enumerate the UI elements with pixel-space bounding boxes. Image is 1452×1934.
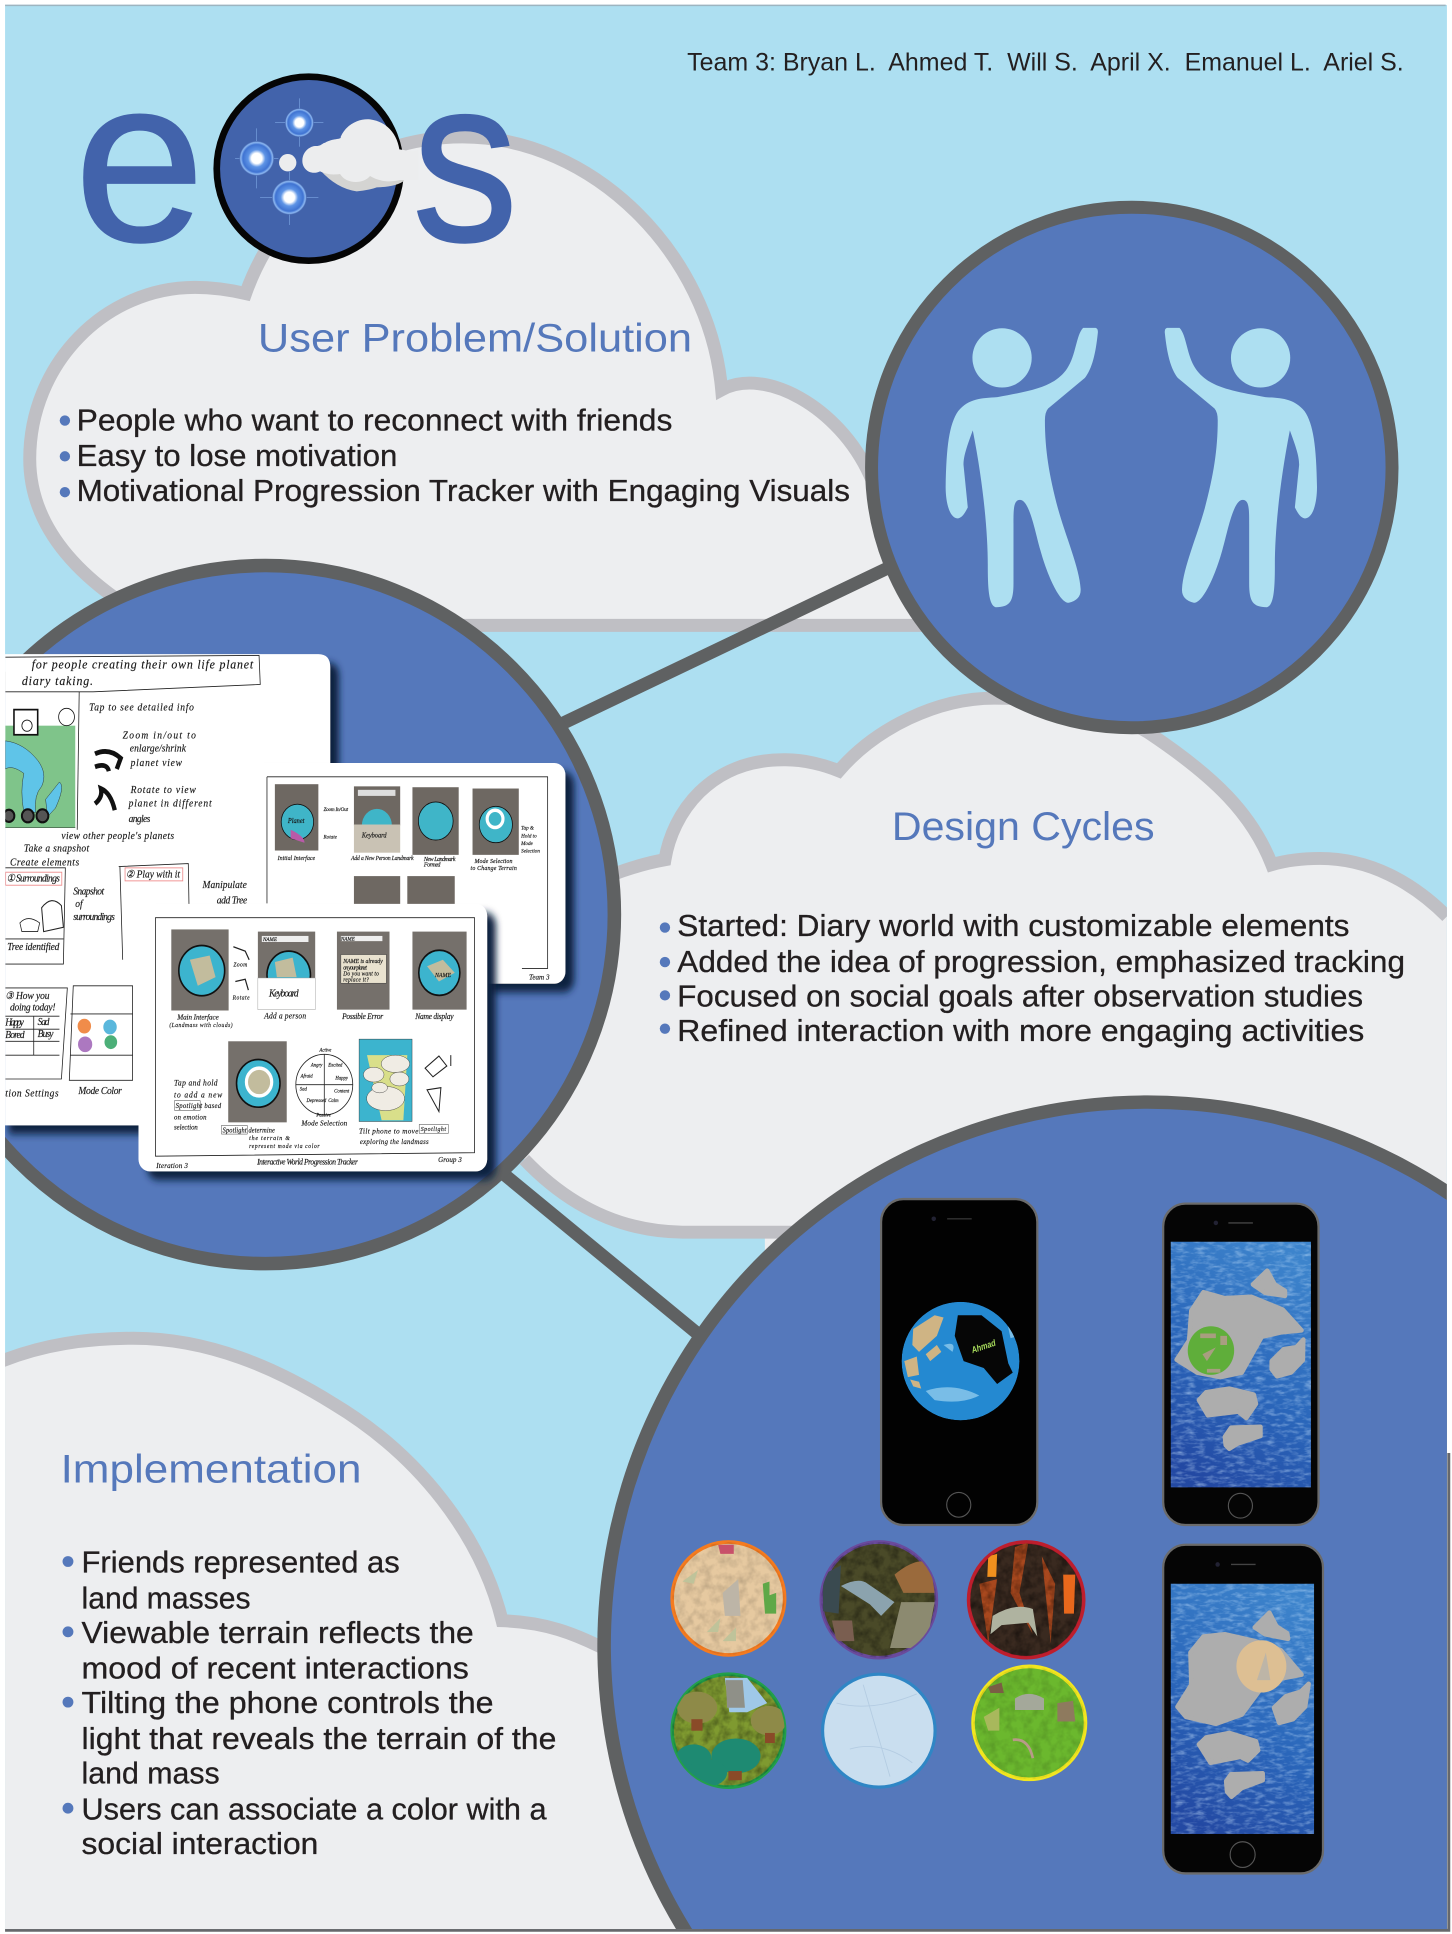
bullet text 1: land masses: [82, 1582, 251, 1615]
sheet 1 drawings: Manipulate: [202, 880, 247, 891]
sheet 1 drawings: Rotate to view: [130, 785, 196, 796]
sheet 1 drawings: Sad: [38, 1016, 50, 1028]
bullet text 2: Viewable terrain reflects the: [82, 1617, 474, 1650]
sheet 1 drawings: planet view: [130, 758, 182, 769]
sheet 3 storyboard frames: Spotlight: [421, 1126, 446, 1133]
sheet 3 storyboard frames: on your planet: [343, 965, 367, 971]
icon: two people high-fiving: [946, 328, 1317, 607]
panel: people circle: [872, 207, 1392, 728]
left person: [946, 328, 1098, 607]
sheet 1 drawings: tion Settings: [5, 1088, 59, 1099]
cloud 1 shape: [30, 137, 938, 625]
bullet text 3: light that reveals the terrain of the: [82, 1723, 556, 1756]
bullet 1: [660, 922, 670, 933]
sheet 3 storyboard frames: Spotlight determine: [223, 1128, 275, 1135]
sheet 1 drawings: view other people's planets: [61, 831, 174, 842]
sheet 1 drawings: Zoom in/out to: [123, 730, 196, 742]
bullet 3: [60, 487, 70, 497]
sheet 3 storyboard frames: Content: [334, 1089, 350, 1095]
bullet 2: [63, 1626, 73, 1637]
heading: implementation: Implementation: [61, 1448, 362, 1492]
sheet 3 storyboard frames: Keyboard: [268, 988, 299, 1000]
sheet 3 storyboard frames: (Landmass with clouds): [169, 1022, 233, 1029]
page edge shadow: [5, 1453, 1449, 1930]
cloud shade: [322, 172, 404, 192]
logo letter e: e: [74, 29, 205, 291]
bullet 2: [660, 957, 670, 967]
bullet 2: [60, 451, 70, 462]
phone 1 globe: [902, 1302, 1019, 1420]
sheet 3 storyboard frames: Tilt phone to move: [359, 1126, 419, 1136]
sheet 3 storyboard frames: Happy: [334, 1076, 349, 1082]
star 3: [260, 172, 318, 225]
phone 3 speaker and home button: [1231, 1563, 1256, 1566]
sheet 1 drawings: doing today!: [10, 1002, 55, 1014]
sheet 2 storyboard frames: Initial Interface: [277, 855, 315, 862]
cloud: implementation panel: [0, 1338, 703, 1929]
phone 2 body: [1163, 1204, 1319, 1525]
cloud 3 outline: [0, 1338, 617, 1655]
sheet 2 storyboard frames: Formed: [423, 861, 441, 869]
sheet 1 drawings: Happy: [4, 1017, 24, 1029]
bullet text 4: social interaction: [82, 1828, 318, 1861]
panel: phones and terrains circle: [597, 1095, 1447, 1929]
bullet text 1: People who want to reconnect with friends: [77, 404, 672, 437]
sheet 2 storyboard frames: Zoom In/Out: [323, 807, 348, 813]
sheet 2 storyboard frames: [267, 777, 550, 981]
sheet 2 storyboard frames: Planet: [287, 818, 305, 825]
sheet 3 storyboard frames: replace it?: [343, 977, 369, 984]
bullet text 2: mood of recent interactions: [82, 1653, 469, 1686]
logo: eos: [83, 73, 512, 264]
terrain: ice: [823, 1674, 935, 1787]
sheet 3 storyboard frames: Mode Selection: [300, 1118, 347, 1127]
logo disc: [217, 77, 401, 261]
sheet 2 storyboard frames: Tap &: [521, 826, 535, 832]
bullet 3: [63, 1697, 73, 1708]
sheet 1 drawings: Create elements: [10, 857, 79, 869]
cloud 2 outline: [524, 698, 1447, 1232]
star 1: [275, 98, 323, 147]
sheet 3 storyboard frames: exploring the landmass: [360, 1138, 429, 1146]
phone 2 spotlight: [1188, 1326, 1234, 1375]
bullet text 3: Tilting the phone controls the: [82, 1687, 494, 1720]
bullet 3: [660, 990, 670, 1001]
right person: [1165, 328, 1317, 607]
phone 3 body: [1163, 1545, 1323, 1873]
sheet 3 storyboard frames: Possible Error: [341, 1012, 384, 1021]
bullet text 4: Users can associate a color with a: [82, 1793, 547, 1826]
sheet 3 storyboard frames: Zoom: [233, 962, 247, 968]
sheet 3 storyboard frames: Sad: [300, 1088, 307, 1093]
sheet 3 storyboard frames: Do you want to: [342, 971, 379, 977]
sheet 3 storyboard frames: the terrain &: [249, 1135, 290, 1142]
bullet 4: [660, 1023, 670, 1034]
sheet 1 drawings: planet in different: [128, 798, 212, 810]
sheet 1 drawings: add Tree: [217, 895, 248, 907]
terrain: lava: [969, 1542, 1084, 1658]
sheet 3 storyboard frames: NAME is already: [342, 958, 383, 965]
centre dot: [279, 154, 296, 171]
sheet 3 storyboard frames: selection: [174, 1123, 198, 1132]
cloud body: [302, 119, 406, 182]
sheet 3 storyboard frames: Excited: [327, 1063, 343, 1069]
phone: land mass with grass spotlight: [1163, 1204, 1319, 1525]
terrain: swamp: [821, 1542, 936, 1658]
sheet 1 drawings: Bored: [5, 1029, 25, 1041]
phone 1 friend name: Ahmad: [969, 1338, 997, 1355]
sheet 1 drawings: for people creating their own life planet: [32, 657, 254, 672]
sheet 1 drawings: ① Surroundings: [6, 873, 60, 885]
bullet text 3: Motivational Progression Tracker with Engaging Visuals: [77, 475, 850, 508]
sheet 3 storyboard frames: Tap and hold: [174, 1078, 218, 1088]
sheet 1 drawings: enlarge/shrink: [130, 743, 186, 755]
phone: land mass with sand spotlight: [1163, 1545, 1323, 1873]
sheet 2 storyboard frames: Rotate: [323, 834, 338, 840]
phones circle disc: [611, 1109, 1447, 1929]
sheet 3 storyboard frames: Angry: [310, 1063, 323, 1069]
bullet 4: [63, 1803, 73, 1814]
sheet 3 storyboard frames: to add a new: [174, 1090, 223, 1100]
sheet 3 storyboard frames: Rotate: [232, 995, 250, 1002]
sheet 2 storyboard frames: Team 3: [529, 972, 550, 981]
sketches circle disc: [0, 566, 614, 1264]
heading: user problem/solution: User Problem/Solution: [258, 317, 692, 361]
cloud 2 fill: [524, 704, 1447, 1250]
phones circle ring: [597, 1095, 1447, 1929]
top edge line: [5, 4, 1446, 6]
sheet 2 storyboard frames: Add a New Person Landmark: [350, 856, 414, 862]
sheet 1 drawings: Mode Color: [77, 1086, 122, 1097]
sheet 1 drawings: of: [75, 899, 84, 910]
bullet 1: [63, 1556, 73, 1567]
people circle disc: [872, 207, 1392, 728]
star 2: [235, 128, 278, 188]
sheet 3 storyboard frames: Add a person: [263, 1011, 306, 1021]
sheet 1 drawings: Tree identified: [7, 941, 59, 953]
team credits: Team 3: Bryan L. Ahmed T. Will S. April X. Emanuel L. Ariel S.: [687, 49, 1404, 76]
sheet 1 drawings: Busy: [38, 1029, 54, 1040]
sheet 2 storyboard frames: Keyboard: [361, 832, 387, 840]
sheet 2 storyboard frames: to Change Terrain: [471, 865, 517, 872]
sheet 1 drawings: Snapshot: [73, 886, 104, 898]
sheet 3 storyboard frames: Main Interface: [176, 1012, 219, 1022]
sheet 3 storyboard frames: Interactive World Progression Tracker: [256, 1157, 359, 1167]
bullet text 2: Easy to lose motivation: [77, 440, 397, 473]
sheet 1 drawings: ③ How you: [5, 990, 50, 1002]
phone 2 land masses: [1177, 1271, 1303, 1449]
phone 3 ocean: [1171, 1584, 1314, 1834]
phone 2 speaker and home button: [1228, 1221, 1253, 1224]
sheet 3 storyboard frames: Afraid: [300, 1075, 313, 1080]
sheet 3 storyboard frames: Passive: [315, 1114, 332, 1119]
phone 3 land masses: [1177, 1613, 1309, 1797]
cloud: design cycles panel: [520, 692, 1447, 1250]
terrain: forest: [672, 1674, 786, 1787]
bullet text 1: Friends represented as: [82, 1547, 400, 1580]
panel: sketches circle: [0, 566, 614, 1264]
sheet 3 storyboard frames: Group 3: [438, 1155, 462, 1164]
connector: sketch circle to phone circle: [501, 1172, 703, 1338]
phone: globe view: [881, 1199, 1037, 1525]
bullet text 3: Focused on social goals after observation studies: [677, 980, 1363, 1013]
sheet 3 storyboard frames: NAME: [434, 972, 451, 979]
sheet 1 drawings: [3, 655, 260, 1099]
sheet 3 storyboard frames: Calm: [328, 1099, 339, 1104]
sheet 1 drawings: angles: [129, 814, 150, 825]
sketch sheet 2: [248, 763, 565, 984]
heading: design cycles: Design Cycles: [892, 805, 1155, 849]
sheet 1 paper: [0, 654, 330, 1125]
sheet 2 paper: [248, 763, 565, 984]
terrain: grassland: [973, 1666, 1086, 1779]
sheet 3 storyboard frames: NAME: [340, 937, 356, 943]
sheet 3 storyboard frames: represent mode via color: [249, 1144, 320, 1150]
logo letter s: s: [412, 29, 518, 291]
sheet 3 storyboard frames: on emotion: [174, 1113, 207, 1121]
list: implementation bullets: [63, 1547, 556, 1861]
logo circle with stars and cloud: [217, 77, 418, 261]
bullet text 1: Started: Diary world with customizable elements: [677, 910, 1349, 943]
phone 1 camera and speaker: [947, 1217, 972, 1220]
sheet 1 drawings: surroundings: [73, 912, 115, 923]
phone 1 body: [881, 1199, 1037, 1525]
sheet 3 storyboard frames: NAME: [262, 937, 278, 943]
bullet 1: [60, 415, 70, 426]
sheet 2 storyboard frames: Selection: [521, 848, 540, 854]
bullet text 2: Added the idea of progression, emphasized tracking: [677, 946, 1405, 979]
sheet 3 storyboard frames: Spotlight based: [176, 1102, 222, 1110]
sheet 3 storyboard frames: Name display: [414, 1012, 454, 1021]
sketch sheet 3: [138, 904, 487, 1171]
sheet 1 drawings: Take a snapshot: [24, 843, 89, 855]
sheet 2 storyboard frames: Hold to: [520, 833, 537, 840]
bullet text 3: land mass: [82, 1758, 220, 1791]
terrain: desert: [672, 1542, 785, 1655]
sheet 3 storyboard frames: Active: [319, 1049, 332, 1054]
sketch sheet 1: [0, 654, 330, 1125]
logo cloud: [302, 119, 406, 192]
sheet 3 storyboard frames: [155, 918, 475, 1170]
cloud 3 fill: [0, 1338, 703, 1929]
sheet 3 storyboard frames: Depressed: [306, 1099, 327, 1104]
bullet text 4: Refined interaction with more engaging activities: [677, 1015, 1364, 1048]
cloud: user problem panel: [30, 137, 938, 625]
sheet 3 paper: [138, 904, 487, 1171]
sheet 1 drawings: Tap to see detailed info: [89, 702, 194, 714]
sheet 2 storyboard frames: Mode Selection: [474, 858, 512, 865]
list: user problem bullets: [60, 404, 850, 508]
phone 2 ocean: [1171, 1242, 1311, 1487]
sheet 2 storyboard frames: Mode: [520, 841, 533, 847]
sheet 1 drawings: ② Play with it: [126, 869, 180, 881]
sheet 3 storyboard frames: Iteration 3: [155, 1161, 188, 1170]
sheet 2 storyboard frames: New Landmark: [423, 856, 456, 863]
connector: people circle to sketch circle: [561, 565, 894, 724]
list: design cycle bullets: [660, 910, 1405, 1048]
sheet 1 drawings: diary taking.: [22, 673, 93, 688]
phone 3 spotlight: [1236, 1640, 1286, 1693]
